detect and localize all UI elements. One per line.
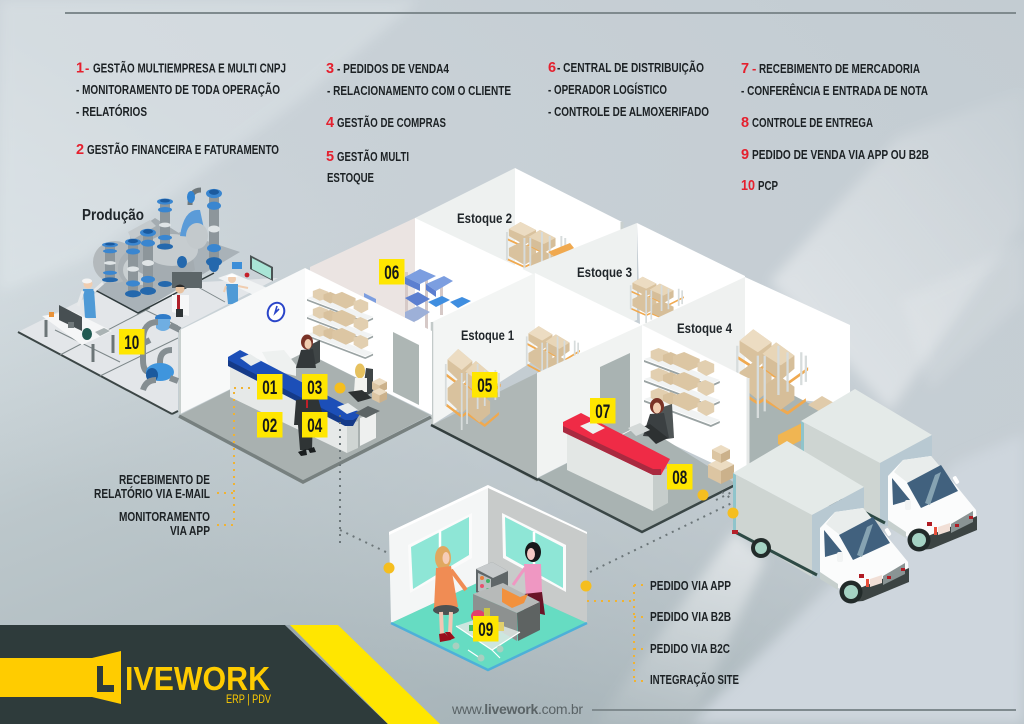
counter — [563, 413, 670, 511]
text block: column 1: 2 — [76, 142, 84, 158]
truck: front — [732, 441, 909, 604]
text block: column 1: 1 — [76, 60, 84, 76]
number badges: 02 — [262, 416, 277, 437]
text block: column 4: 10 — [741, 178, 755, 194]
text block: column 2: - RELACIONAMENTO COM O CLIENTE — [327, 83, 511, 98]
text block: column 4: RECEBIMENTO DE MERCADORIA — [759, 61, 920, 76]
connector: orange dotted left — [217, 388, 251, 525]
room: reception 01-04 — [179, 268, 432, 482]
right callout text: PEDIDO VIA B2B — [650, 609, 731, 624]
text block: column 2: 4 — [326, 115, 334, 131]
door — [393, 332, 419, 405]
room: Estoque 3 — [520, 223, 745, 360]
supervisor — [172, 284, 189, 317]
truck: rear — [800, 389, 977, 552]
window right — [502, 513, 566, 592]
area labels: Estoque 4 — [677, 320, 732, 336]
text block: column 3: - CENTRAL DE DISTRIBUIÇÃO — [557, 60, 704, 75]
logo: ERP | PDV — [226, 694, 271, 706]
left callout text: RELATÓRIO VIA E-MAIL — [94, 486, 210, 501]
copier — [355, 406, 380, 446]
text block: column 1: - RELATÓRIOS — [76, 104, 147, 119]
number badges: 10 — [124, 333, 139, 354]
text block: column 1 — [76, 60, 286, 158]
left callout text: MONITORAMENTO — [119, 509, 210, 524]
counter — [228, 350, 361, 453]
room: order desk 07/08 — [537, 325, 748, 532]
text block: column 3: 6 — [548, 60, 556, 76]
wall shelves — [644, 348, 720, 427]
left callout text — [94, 472, 210, 538]
clerk — [628, 398, 674, 444]
number badges: 08 — [672, 468, 687, 489]
area labels: Estoque 3 — [577, 264, 632, 280]
text block: column 2 — [326, 61, 511, 185]
right callout text: PEDIDO VIA APP — [650, 578, 731, 593]
counter — [473, 583, 540, 641]
store room 09 — [389, 485, 587, 670]
text block: column 2: GESTÃO MULTI — [337, 149, 409, 164]
door — [600, 353, 630, 445]
worker in overalls — [78, 278, 103, 318]
text block: column 1: - MONITORAMENTO DE TODA OPERAÇÃO — [76, 82, 280, 97]
text block: column 4: 8 — [741, 115, 749, 131]
text block: column 1: GESTÃO FINANCEIRA E FATURAMENTO — [87, 142, 279, 157]
shopping cart — [452, 608, 520, 662]
product display — [476, 562, 508, 600]
room: 06 stock — [310, 218, 535, 355]
number badges: 07 — [595, 402, 610, 423]
text block: column 4: 7 — [741, 61, 749, 77]
text block: column 4: - — [752, 61, 756, 76]
pipework — [140, 314, 180, 390]
text block: column 3: - OPERADOR LOGÍSTICO — [548, 82, 667, 97]
connector: orange dotted right — [587, 585, 645, 682]
office bench with monitor — [42, 305, 113, 362]
left callout text: RECEBIMENTO DE — [119, 472, 210, 487]
number badges: 09 — [478, 620, 493, 641]
text block: column 4: PCP — [758, 178, 778, 193]
text block: column 4 — [741, 61, 929, 194]
area labels: Estoque 2 — [457, 210, 512, 226]
window left — [408, 513, 472, 593]
text block: column 1: - — [85, 60, 89, 76]
text block: column 4: - CONFERÊNCIA E ENTRADA DE NOTA — [741, 83, 928, 98]
logo: IVEWORK — [125, 660, 270, 697]
text block: column 2: GESTÃO DE COMPRAS — [337, 115, 446, 130]
area labels: Produção — [82, 207, 144, 224]
seller — [513, 542, 545, 615]
number badges — [119, 259, 692, 642]
text block: column 4: 9 — [741, 147, 749, 163]
footer panel — [0, 625, 440, 724]
room: Estoque 1 — [431, 273, 642, 482]
production area — [18, 189, 278, 414]
website address: www.livework.com.br — [451, 701, 583, 717]
right callout text: PEDIDO VIA B2C — [650, 641, 730, 656]
right callout text: INTEGRAÇÃO SITE — [650, 672, 739, 687]
number badges: 05 — [477, 376, 493, 397]
area labels: Estoque 1 — [461, 327, 514, 343]
assistant — [348, 364, 387, 403]
text block: column 3 — [548, 60, 709, 119]
production machinery — [93, 189, 222, 297]
logo — [0, 651, 271, 706]
connector dots — [334, 382, 738, 592]
icon: clock — [265, 300, 287, 324]
customer in suit — [294, 398, 322, 456]
customer — [433, 546, 466, 642]
yellow stripe — [290, 625, 440, 724]
wall shelves — [307, 288, 373, 359]
number badges: 04 — [307, 416, 323, 437]
text block: column 3: - CONTROLE DE ALMOXERIFADO — [548, 104, 709, 119]
right callout text — [650, 578, 739, 687]
text block: column 2: 3 — [326, 61, 334, 77]
left callout text: VIA APP — [170, 523, 210, 538]
text block: column 4: PEDIDO DE VENDA VIA APP OU B2B — [752, 147, 929, 162]
text block: column 2: ESTOQUE — [327, 170, 374, 185]
receptionist — [262, 334, 320, 376]
text block: column 2: - PEDIDOS DE VENDA4 — [337, 61, 450, 76]
bottom rule — [592, 709, 1016, 711]
worker at lab bench — [218, 255, 273, 304]
text block: column 1: GESTÃO MULTIEMPRESA E MULTI CNPJ — [93, 60, 286, 76]
top rule — [65, 12, 1016, 14]
number badges: 03 — [307, 378, 322, 399]
text block: column 2: 5 — [326, 149, 334, 165]
room: Estoque 4 — [642, 277, 860, 490]
parcels — [708, 445, 734, 484]
room: Estoque 2 — [415, 168, 622, 300]
text block: column 4: CONTROLE DE ENTREGA — [752, 115, 873, 130]
area labels — [82, 207, 732, 343]
number badges: 06 — [384, 263, 399, 284]
connector: grey dotted lines — [340, 415, 733, 572]
number badges: 01 — [262, 378, 278, 399]
